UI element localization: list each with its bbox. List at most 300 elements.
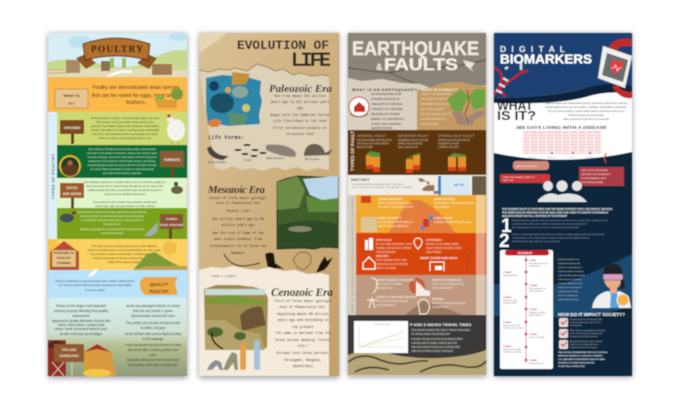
section: p and s waves: THE GAP SHOWS DISTANCE TO EPICENTER [411, 346, 460, 349]
right tips: All poultry should be free of any tears [127, 358, 180, 362]
icon: ear [371, 278, 377, 293]
barn with tips sign: GUIDELINES [59, 354, 79, 358]
cenozoic bullets: Third of three major geologic [274, 299, 332, 303]
life forms: Fish [244, 158, 251, 162]
roadmap paragraph: sensors in many devices, [558, 266, 583, 269]
cenozoic section [199, 266, 333, 376]
closing statement: COLLABORATION BETWEEN HEALTH CARE, [558, 358, 606, 361]
cenozoic landscape image [204, 285, 268, 350]
section: purpose of poultry farming: products and eggs for human consumption and food [93, 256, 156, 260]
types of fault: TYPES OF FAULT [350, 131, 356, 171]
icon: dna helix [494, 63, 528, 96]
what is an earthquake: THE EARTH'S SURFACE, [371, 102, 403, 106]
roadmap paragraph: and research is growing [558, 278, 582, 281]
panel: earthquake and faults [348, 33, 486, 376]
timeline card: Regulators endorse [529, 311, 546, 314]
section: during: MOVE TO AN OPEN AREA [426, 242, 459, 246]
arrow to humans [212, 332, 223, 349]
heading: 365 days living with a disease: 365 DAYS LIVING WITH A DISEASE [516, 125, 607, 130]
section: during: AND TREES [426, 250, 442, 254]
dot matrix chart: Treatment [567, 156, 576, 159]
definition paragraph: through digital devices such as portables, wearables, implantables or digestibles [545, 106, 628, 109]
section: before: HAVE A PLAN [434, 216, 452, 220]
check list: for patients and health systems [570, 335, 598, 338]
section: guinea fowl and pigeons: Squabs, young pigeons, are raised for their very tender meat [80, 228, 144, 231]
timeline card: Trials run remotely [529, 336, 545, 339]
section: before: WHEN OUTSIDE [434, 197, 455, 201]
icons: supplies [421, 216, 433, 230]
mesozoic forest image [277, 176, 338, 249]
mesozoic bullets: Saw the rise of some of the [212, 231, 264, 235]
timeline card: 1 YEAR [529, 259, 536, 262]
mesozoic bullets: eons of Phanerozoic Eon [216, 201, 260, 205]
torn paper: paleozoic section [199, 64, 333, 171]
icon: wave head [418, 299, 430, 314]
section: chicken [57, 112, 187, 145]
check list: Accelerated research with real world [570, 340, 602, 343]
section: after: CHECK YOURSELF FOR INJURY [376, 279, 415, 282]
statement paragraph: INSIGHTS FROM THE FULL PICTURE OF THE PATIENT [502, 215, 568, 218]
what is a fault: WHAT IS A FAULT? [421, 87, 458, 92]
mesozoic bullets: 252 million years ago to 66 [212, 217, 264, 221]
timeline card: 3 YEARS [529, 284, 538, 287]
mesozoic bullets: Tyrannosaurus rex to bison and [209, 244, 267, 248]
icon: factory [416, 281, 430, 296]
roadmap paragraph: collecting data about people [558, 274, 586, 277]
section: during [356, 233, 486, 275]
point 1: a patient's health and how their condition changes over time across every day of their [512, 222, 588, 226]
section: before: HEAD TO SAFETY [378, 216, 402, 220]
dot matrix chart: Symptoms [547, 156, 556, 159]
icon: reverse fault block [406, 153, 420, 173]
check list: of life with more data, reducing costs [570, 332, 602, 335]
icon: red barn sign: POULTRY [57, 256, 72, 260]
title: and faults: FAULTS [384, 55, 458, 74]
sign: turkeys: TURKEYS [164, 158, 181, 162]
right tips: in the package [143, 337, 164, 341]
section: during: AND IT IS SAFE [376, 266, 396, 270]
point 1: Digital biomarkers can provide continuous measurement outside the clinic, giving a more complete picture of [512, 219, 608, 222]
what is an earthquake: WHAT IS AN EARTHQUAKE? [352, 87, 418, 92]
left tips: Texture is the single most important [56, 304, 106, 308]
sign: what is it: WHAT IS [63, 93, 80, 98]
timeline card: becomes more common [503, 326, 523, 330]
heading: mesozoic era: Mesozoic Era [207, 184, 266, 196]
mesozoic bullets: million years ago [222, 223, 254, 227]
section: guinea fowl and pigeons: and small flocks kept [101, 232, 123, 235]
icon: red barn sign [50, 241, 79, 270]
statement paragraph [502, 208, 613, 218]
fast fact strip [348, 175, 486, 195]
closing statement [558, 351, 609, 368]
roadmap paragraph: really feel day to day [558, 290, 579, 293]
section: after: IMMEDIATELY [432, 306, 449, 309]
mesozoic bullets: Second of three major geologic [209, 196, 267, 200]
point 2: 2 [499, 231, 510, 252]
sign: what is it [55, 89, 88, 108]
section: after: AND WARNINGS [376, 304, 396, 307]
section: ducks and geese: Goose raising is often a lesser food enterprise, though some [93, 201, 158, 204]
icon: dinosaur silhouettes [265, 252, 333, 274]
tree branch [462, 245, 480, 275]
panel shadows [48, 34, 632, 378]
section: before: MOVE AWAY FROM WALLS [378, 220, 413, 224]
closing statement: THE DIGITAL BIOMARKERS REVOLUTION WILL [558, 351, 609, 354]
paleozoic bullets [270, 94, 330, 136]
farm header scene [48, 33, 187, 77]
mesozoic section [207, 176, 338, 274]
what is an earthquake [349, 87, 418, 130]
section: chicken: 20th century, but by the middle of that century, most [96, 121, 154, 124]
what is a fault: ALLOW THE BLOCKS TO [421, 112, 451, 116]
section: purpose of poultry farming: needs of the general supply [107, 260, 141, 264]
section: during: IF YOU ARE INDOORS, STAY [376, 242, 413, 246]
point 1: year, helping doctors to see how a disease is developing and respond faster [512, 226, 580, 229]
section: before: ON UNTIL SHAKING STOPS [378, 205, 413, 209]
section: p and s waves: TO TRAVEL FROM THE EPICENTER [411, 333, 450, 336]
sign: guinea fowl: FOWL PIGEONS [160, 223, 183, 227]
what is an earthquake: CRUST THAT CREATES [371, 122, 401, 126]
timeline card: 5 YEARS [529, 308, 538, 311]
section: during: OUTDOORS [426, 238, 442, 242]
drop cover hold: DROP, COVER AND HOLD [420, 256, 458, 260]
section: before: AND WIRES [434, 205, 449, 209]
section: chicken: CHICKEN [64, 126, 81, 130]
side label: types of poultry: TYPES OF POULTRY [52, 153, 56, 199]
cenozoic bullets: Quaternary [293, 364, 313, 368]
speech bubbles and people: ONE DOCTOR VISIT A YEAR [581, 169, 608, 172]
roadmap paragraph: future drug discovery [558, 298, 579, 301]
section: turkeys [57, 145, 187, 178]
icon: home [363, 257, 375, 269]
what is a fault [417, 82, 486, 130]
section: quality poultry: Poultry contribution to good business and nutrition. Means there [55, 279, 135, 283]
section: ducks and geese: AND GEESE [63, 192, 81, 196]
speech bubbles and people: LIVED WITH A DISEASE [581, 181, 604, 184]
point 2: to be offered at the right moment to the right individual [512, 240, 560, 243]
scientist illustration [592, 264, 631, 308]
panel: digital biomarkers [494, 33, 632, 376]
mesozoic bullets: mammals [231, 251, 245, 255]
types of fault: WHEN THE HANGING [398, 142, 423, 146]
section: during: INDOORS [376, 254, 389, 258]
section: after: AROUND YOU [376, 287, 393, 290]
paleozoic bullets: colonized land [286, 132, 314, 136]
banner: quality poultry [140, 277, 178, 295]
check list: Improved patient care through better [570, 318, 603, 321]
definition paragraph: while a person lives their life in the real world [563, 118, 610, 121]
heading: cenozoic era: Cenozoic Era [271, 287, 333, 299]
timeline card: continuous monitoring [503, 350, 522, 354]
check list: leading to better new therapies [570, 346, 597, 349]
section: after [356, 275, 486, 315]
icon: fault block [447, 89, 485, 125]
left tips: assessment [72, 314, 90, 318]
dot matrix chart [523, 131, 601, 159]
types of fault: WALL MOVES UP [398, 146, 418, 149]
types of fault: REVERSE FAULTS OCCUR [398, 139, 429, 142]
timeline card: 2 YEARS [503, 271, 512, 274]
definition text: feathers. [126, 100, 146, 106]
section: p and s waves: S WAVES ARE SLOWER, ARRIVE SECOND [411, 342, 458, 345]
icon: red barn sign: PURPOSE OF [54, 251, 74, 255]
check list: monitoring and fewer trips to clinics [570, 321, 601, 324]
panel: poultry infographic [48, 33, 187, 377]
cenozoic section: Today's climate [211, 274, 236, 278]
timeline card: Personalised care [529, 362, 544, 365]
section: before: DROP, COVER AND HOLD [378, 201, 411, 205]
types of fault: LATERAL OR LEFT [438, 146, 460, 149]
section: after: FOLLOW OFFICIAL ADVICE [376, 300, 409, 303]
dark lower body [494, 152, 632, 376]
blue header [494, 33, 632, 103]
speech bubbles and people: DAILY LIFE [503, 179, 514, 182]
section: guinea fowl and pigeons: and have spread from Africa across many farms and regions [80, 215, 145, 218]
roadmap paragraph: very fast, making it easier [558, 282, 583, 285]
panel: evolution of life [199, 33, 339, 376]
banner: quality poultry: POULTRY [149, 289, 169, 294]
timeline card: Health systems adopt [503, 348, 522, 351]
types of fault [348, 130, 486, 175]
title: LIFE [291, 50, 331, 73]
timeline card: Multi device data [503, 299, 518, 302]
icon: farm produce [155, 88, 183, 108]
timeline card: Wearable sensors and [529, 262, 548, 265]
fast fact strip: THE GREAT EARTHQUAKE AND FAULT SYSTEM IS [351, 183, 404, 186]
section: guinea fowl and pigeons [57, 208, 187, 240]
section: ducks and geese: small, free-range form of meat and eggs through the use for many in their [86, 185, 164, 188]
statement paragraph: THE SOONER WHAT IS CAPTURED AND THE MORE PATIENTS THEY USE DIGITAL DEVICES, [502, 208, 613, 211]
check list: evidence from daily patient lives, [570, 343, 599, 346]
title: digital: D I G I T A L [500, 44, 565, 54]
yellow band: what is it [48, 77, 187, 112]
cracked grey header [348, 33, 486, 89]
types of fault: SIDEWAYS, RIGHT- [438, 142, 460, 146]
timeline card: digital endpoints [529, 314, 543, 316]
point 1 [501, 216, 608, 237]
what is an earthquake: AN EARTHQUAKE IS AN [371, 92, 402, 96]
timeline card [500, 250, 553, 369]
section: before: DURING SHAKING [378, 197, 402, 201]
left tips: colour, meat, processed defects such [55, 327, 108, 331]
life forms: Amphibians [266, 156, 284, 160]
icon: mallard duck [171, 182, 183, 194]
definition paragraph [545, 102, 628, 121]
left tips [52, 304, 111, 336]
what is a fault: OR ZONE OF FRACTURES [421, 97, 454, 101]
types of fault: STRIKE-SLIP FAULTS MOVE [438, 139, 470, 142]
right tips: that has any purple or green [133, 309, 173, 313]
section: after: MOVE TO HIGHER GROUND [432, 302, 466, 305]
paleozoic reef image [206, 72, 262, 127]
arrow to dinosaurs [224, 254, 260, 266]
fast fact strip: ONE OF THE MOST ACTIVE AND THE LARGEST ON EARTH [351, 186, 413, 189]
section: after: AND CHECK OTHERS [376, 283, 402, 286]
paleozoic bullets: Began with the Cambrian Period [270, 113, 330, 117]
icon: field hill [133, 241, 187, 270]
section: during: AWAY FROM POWER LINES [426, 246, 462, 250]
cenozoic bullets: life." [297, 344, 309, 348]
barn with tips sign [48, 340, 116, 377]
cenozoic bullets: eons of Phanerozoic Eon. [279, 305, 327, 309]
what is a fault: BETWEEN TWO BLOCKS [421, 102, 452, 106]
fast fact strip: FAST FACT [351, 178, 370, 182]
dot matrix chart: Check-up [587, 157, 595, 159]
closing statement: TECHNOLOGY AND REGULATORS [558, 362, 595, 364]
what is an earthquake: ENERGY IN THE EARTH'S [371, 117, 404, 121]
paper corner curl [199, 33, 227, 53]
section: during: STAY INSIDE UNTIL THE [376, 258, 407, 262]
what is an earthquake: A RESULT OF A SUDDEN [371, 107, 403, 111]
map graphic: 45 43 [454, 182, 465, 187]
roadmap paragraph: rapidly developing with [558, 262, 581, 265]
timeline card: 7 YEARS [529, 333, 538, 336]
section: turkeys: After chickens, 25 turkeys are most raised widely, domesticated [88, 148, 156, 151]
icon: location pin [414, 238, 422, 249]
icon: pigeon [144, 222, 158, 236]
cenozoic bullets: Divided into three periods: [276, 351, 330, 355]
title: biomarkers: BIOMARKERS [500, 52, 592, 66]
closing statement: IMPROVE PATIENTS' LIVES BUT IT NEEDS [558, 354, 603, 358]
speech bubbles and people: PATIENT EXPERIENCE [516, 165, 538, 168]
paleozoic bullets: Life flourished in the seas [273, 119, 327, 123]
sign: what is it: IT? [68, 101, 75, 106]
icon: building [365, 238, 373, 250]
section: purpose of poultry farming: kinds of domestic birds on a commercial basis for meat, eggs [88, 248, 161, 252]
timeline card: 6 YEARS [503, 321, 512, 324]
section: after: THEY CAN HAPPEN AFTER [432, 283, 465, 286]
section: p and s waves: P WAVES TRAVEL FASTEST AND ARRIVE FIRST [411, 338, 464, 341]
right tips: color [150, 353, 157, 357]
section: turkeys: breeding facilities across the country with 40 to 50 farms, through [88, 164, 157, 167]
cenozoic bullets: Beginning about 66 million [277, 312, 329, 316]
life forms: Mollusks [305, 157, 320, 161]
cenozoic bullets [274, 299, 332, 368]
section: p and s waves: TIME IS PLOTTED AGAINST DISTANCE [411, 350, 454, 353]
icon: strike-slip fault block [448, 153, 466, 171]
society heading: HOW DO IT IMPACT SOCIETY? [558, 312, 625, 317]
types of fault: STRIKE-SLIP FAULT [438, 134, 475, 138]
speech bubbles and people: CAPTURES ONLY A SNAPSHOT [581, 173, 612, 176]
section: quality poultry: to ensure safety [85, 288, 106, 292]
life forms [207, 134, 333, 164]
title: earthquake: EARTHQUAKE [352, 39, 479, 60]
check list: and hospitals [570, 324, 582, 327]
sign: guinea fowl: GUINEA [166, 217, 178, 221]
left tips: Appearance quality attributes include skin [52, 319, 111, 323]
right tips: and smell with a creamy yellow skin [128, 348, 178, 352]
paleozoic bullets: First vertebrate animals on [273, 126, 327, 130]
roadmap paragraph: to measure how patients [558, 286, 583, 289]
sign: guinea fowl [160, 214, 183, 239]
life forms: Life Forms: [208, 134, 244, 141]
section: after: EXPECT AFTERSHOCKS [432, 279, 462, 282]
section: chicken: industry. The market for chicken meat has grown substantially [91, 129, 160, 132]
definition paragraph: Digital biomarkers are characteristics that are objectively measured and collected [545, 102, 628, 105]
timeline card: ROADMAP [518, 251, 532, 255]
right tips: Avoid chicken with excess liquid pooling [125, 332, 181, 336]
cenozoic bullets: Greek phrase meaning "recent [275, 338, 331, 342]
check list: Better disease management and quality [570, 329, 605, 332]
right tips [125, 304, 182, 367]
point 2 [499, 231, 605, 252]
section: ducks and geese: Duck raising is practiced on a smaller scale in terms of numbers, usually as a [84, 181, 166, 184]
cenozoic bullets: The name is derived from the [275, 331, 331, 335]
icon: turkey [59, 155, 81, 177]
section: turkeys: numbers in Europe, where their wild relatives lived for a long time [87, 156, 157, 159]
section: p and s waves: THIS GRAPH SHOWS THE TIME IT TAKES THE WAVES [411, 329, 471, 332]
section: turkeys: with origin in the western hemisphere, turkeys were raised in great [87, 152, 157, 155]
side label: types of poultry [48, 112, 57, 298]
timeline card: Digital biomarkers [503, 274, 518, 277]
what is it heading [497, 99, 536, 123]
dot matrix chart: Diagnosis [528, 157, 536, 159]
section: chicken: birds to cut pieces and processed chicken meat [99, 137, 152, 140]
icon: smart watch [598, 39, 632, 98]
section: purpose of poultry farming: This provides a great commercially, contributing to poultry [90, 252, 159, 256]
types of fault: NORMAL FAULT [357, 134, 387, 138]
section: before: MOVE AWAY FROM BUILDINGS [434, 201, 474, 205]
timeline card: 4 YEARS [503, 296, 512, 299]
life forms: Arthropods [208, 160, 226, 164]
section: quality poultry [48, 268, 187, 298]
timeline card: Data standards and [529, 287, 546, 290]
definition paragraph: They are used to explain or predict health related outcomes and they can be [547, 110, 625, 113]
definition paragraph: collected continuously and remotely [568, 114, 605, 117]
what is an earthquake: RELEASE OF STORED [371, 112, 400, 116]
left tips: colour, meat colour, cooked meat [58, 323, 104, 327]
icon: house on crack [349, 97, 369, 118]
what is a fault: EACH OTHER [421, 122, 438, 126]
section: during: THERE, MOVE AWAY FROM [376, 246, 412, 250]
red pointer [604, 153, 606, 163]
section: turkeys: and made for the industry expansion [103, 172, 142, 175]
types of fault: REVERSE FAULT [398, 134, 430, 138]
right strip decoration [476, 195, 485, 315]
closing statement: TO BE TRULY EFFECTIVE [558, 366, 585, 368]
timeline card: 8 YEARS [503, 345, 512, 348]
banner: quality poultry: QUALITY [150, 282, 168, 287]
section: ducks and geese: traditional Asian food with a considerable value associated to geese in [88, 189, 163, 192]
section: tips and farm [48, 298, 187, 377]
roadmap paragraph: which is valuable for [558, 294, 578, 297]
section: ducks and geese: DUCKS [66, 186, 78, 190]
point 2: changes before a crisis, reducing trips to hospital and allowing more targeted treatment [512, 236, 589, 240]
timeline card: Remote patient care [503, 324, 520, 327]
check icons [559, 318, 568, 349]
what is an earthquake: SEISMIC WAVES [371, 126, 392, 130]
heading: paleozoic era: Paleozoic Era [269, 83, 332, 95]
right tips: Fresh carcasses should present no flaw [125, 343, 182, 347]
right tips: discolouration around the neck [131, 314, 175, 318]
icon: normal fault block [366, 151, 380, 172]
mesozoic bullets: "middle life" [226, 209, 251, 213]
what is a fault: A FAULT IS A FRACTURE [421, 92, 452, 96]
section: before [356, 195, 486, 234]
timeline card: clinical validation [529, 290, 543, 292]
title banner: Poultry [76, 38, 157, 69]
cenozoic bullets: Paleogene, Neogene, [284, 358, 322, 362]
roadmap paragraph: Digital biomarkers are [558, 258, 580, 261]
title [237, 38, 331, 73]
what is a fault: MOVE RELATIVE TO [421, 117, 446, 121]
section: before: AND FALLING OBJECTS [378, 224, 409, 228]
types of fault: EACH OTHER [357, 146, 373, 149]
what is a fault: OF ROCK. FAULTS [421, 107, 444, 111]
travel time chart: Travel time curves [374, 323, 390, 326]
section: chicken: Meat production of chicken, meat and eggs began in the early [91, 117, 160, 120]
paleozoic bullets: Ran from about 542 million [274, 94, 326, 98]
